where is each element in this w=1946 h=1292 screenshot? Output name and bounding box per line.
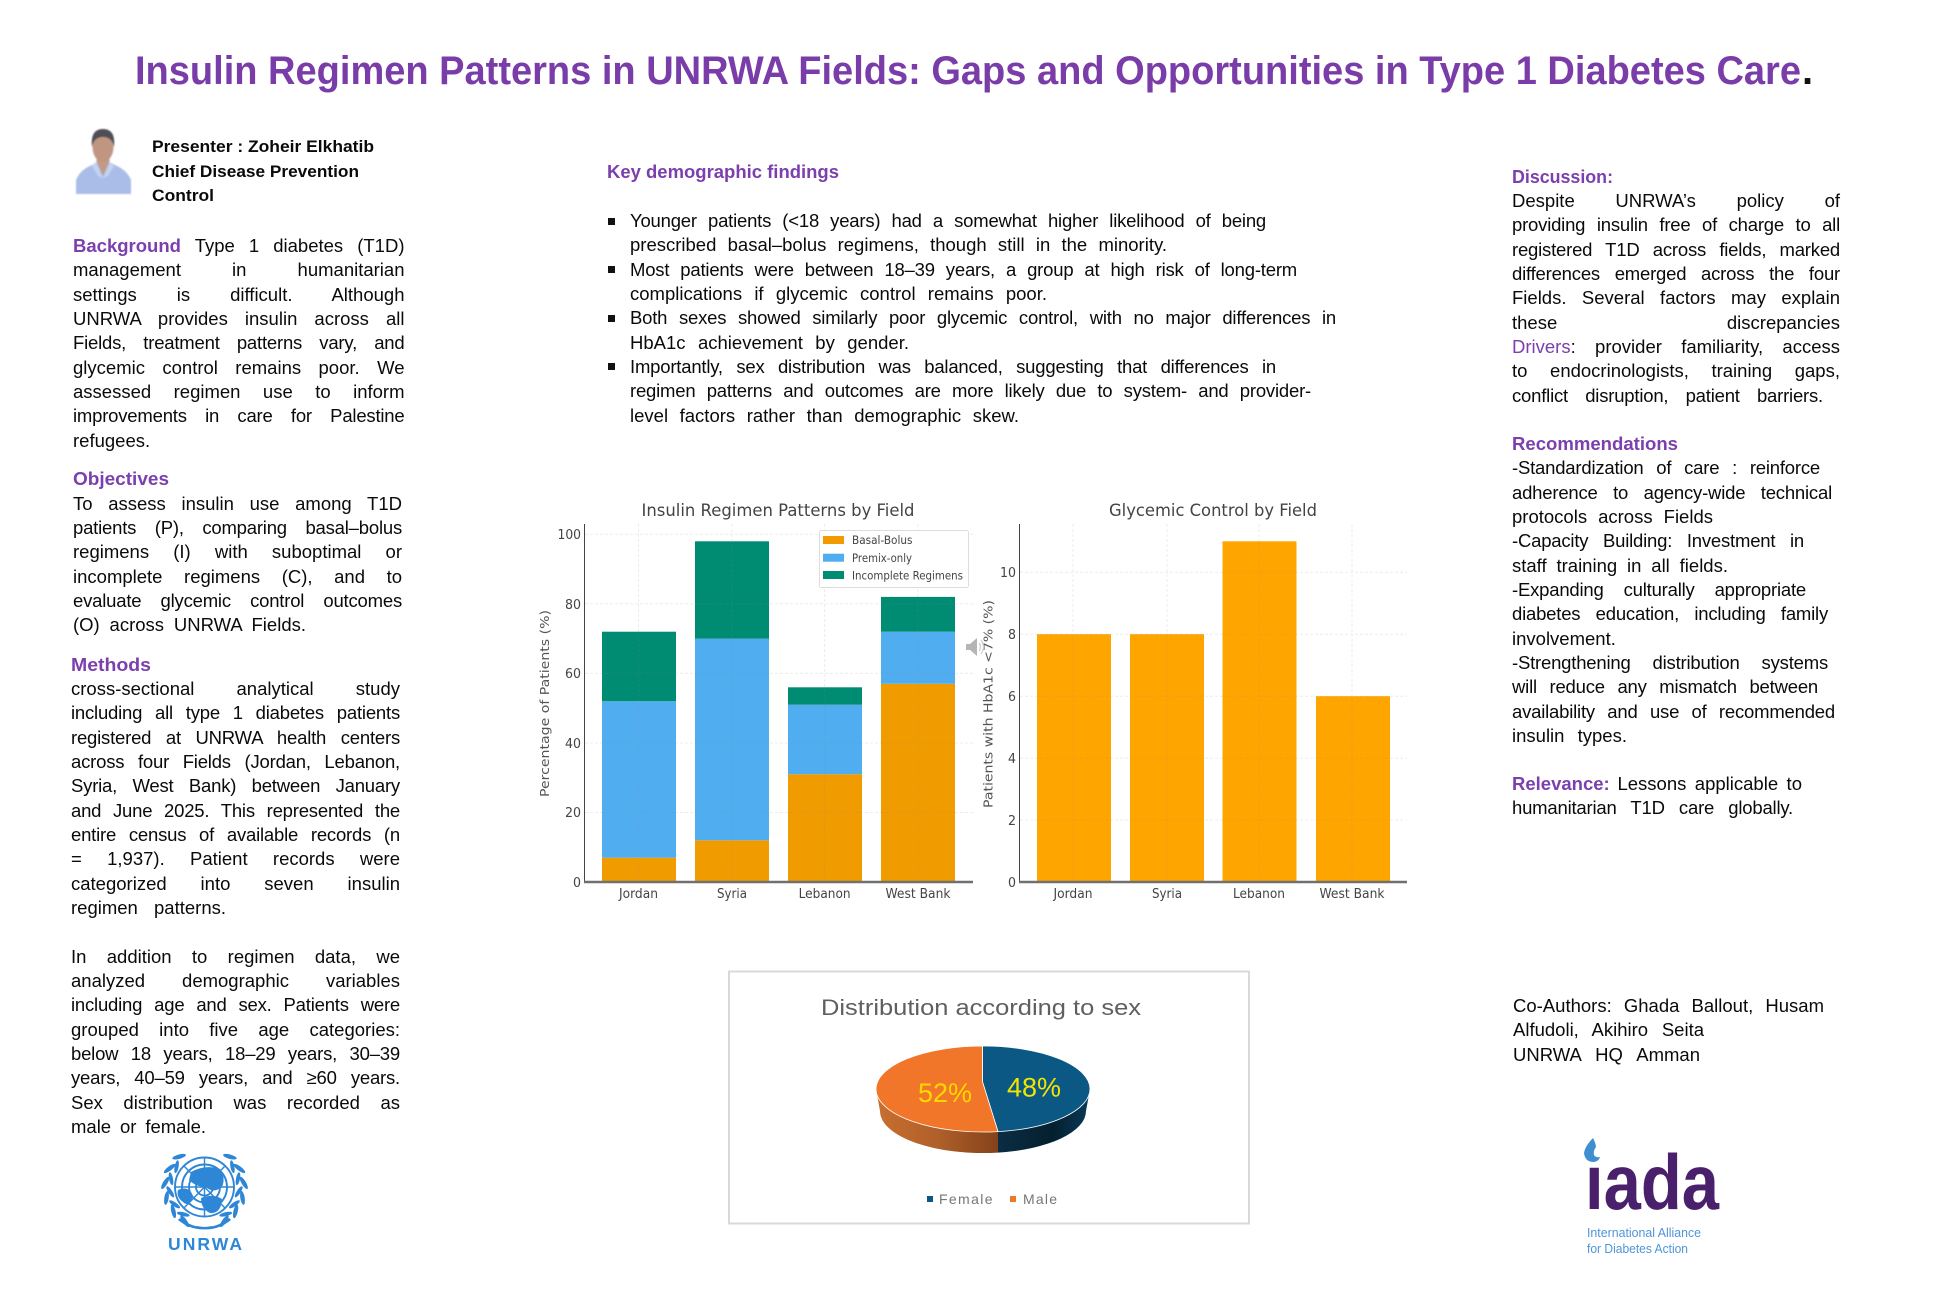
x axis categories: Syria bbox=[717, 887, 747, 902]
text block: key demographic findings: Importantly, sex distribution was balanced, suggesting that differences in bbox=[630, 356, 1276, 377]
x axis categories: West Bank bbox=[1320, 887, 1385, 902]
emblem laurel wreath left bbox=[160, 1153, 213, 1229]
stacked bars: West Bank bbox=[881, 597, 955, 882]
y axis ticks: 0 bbox=[1008, 876, 1016, 891]
x axis categories: Syria bbox=[1152, 887, 1182, 902]
text block: discussion: registered T1D across fields, marked bbox=[1512, 239, 1840, 260]
text block: demographic variables: years, 40–59 years, and ≥60 years. bbox=[71, 1067, 400, 1088]
bars bbox=[1037, 541, 1390, 882]
stacked bars: Jordan bbox=[602, 632, 676, 882]
text block: co-authors bbox=[1513, 995, 1824, 1065]
logo wordmark: UNRWA bbox=[168, 1234, 242, 1254]
legend: Basal-Bolus bbox=[852, 533, 913, 547]
text block: relevance bbox=[1512, 773, 1802, 818]
text block: recommendations: diabetes education, including family bbox=[1512, 603, 1828, 624]
logo tagline bbox=[1587, 1226, 1701, 1256]
pie title: Distribution according to sex bbox=[821, 995, 1141, 1020]
y axis ticks: 8 bbox=[1008, 628, 1016, 643]
emblem globe bbox=[175, 1157, 234, 1217]
text block: recommendations: -Strengthening distribution systems bbox=[1512, 652, 1828, 673]
logo: UNRWA bbox=[160, 1153, 249, 1254]
text block: key demographic findings: complications if glycemic control remains poor. bbox=[630, 283, 1047, 304]
text block: methods: and June 2025. This represented the bbox=[71, 800, 400, 821]
text block: background: refugees. bbox=[73, 430, 150, 451]
pie side: female bbox=[998, 1089, 1090, 1153]
logo tagline: for Diabetes Action bbox=[1587, 1242, 1688, 1256]
heading: key demographic findings: Key demographic findings bbox=[607, 161, 839, 182]
text block: demographic variables: Sex distribution was recorded as bbox=[71, 1092, 400, 1113]
text block: relevance: humanitarian T1D care globally. bbox=[1512, 797, 1793, 818]
text block: recommendations bbox=[1512, 457, 1835, 746]
y axis ticks: 2 bbox=[1008, 814, 1016, 829]
stacked bars: Lebanon bbox=[788, 687, 862, 882]
logo wordmark: iada bbox=[1585, 1138, 1720, 1226]
text block: methods: across four Fields (Jordan, Lebanon, bbox=[71, 751, 400, 772]
y axis ticks: 6 bbox=[1008, 690, 1016, 705]
heading: recommendations: Recommendations bbox=[1512, 433, 1678, 454]
x axis categories: Lebanon bbox=[799, 887, 851, 902]
text block: background: UNRWA provides insulin across all bbox=[73, 308, 404, 329]
text block: methods: including all type 1 diabetes patients bbox=[71, 702, 400, 723]
text block: recommendations: -Standardization of care : reinforce bbox=[1512, 457, 1820, 478]
text block: co-authors: UNRWA HQ Amman bbox=[1513, 1044, 1700, 1065]
y axis ticks: 100 bbox=[558, 528, 581, 543]
presenter details bbox=[152, 137, 374, 205]
text block: recommendations: protocols across Fields bbox=[1512, 506, 1713, 527]
pie legend bbox=[927, 1191, 1057, 1207]
text block: discussion: conflict disruption, patient barriers. bbox=[1512, 385, 1823, 406]
text block: discussion: these discrepancies bbox=[1512, 312, 1840, 333]
text block: discussion bbox=[1512, 190, 1840, 406]
legend: Incomplete Regimens bbox=[852, 568, 963, 582]
text block: methods: Syria, West Bank) between January bbox=[71, 775, 400, 796]
text block: demographic variables: In addition to regimen data, we bbox=[71, 946, 400, 966]
icon: blue drop bbox=[1584, 1138, 1600, 1162]
presenter details: Control bbox=[152, 186, 214, 205]
icon: presenter photo bbox=[76, 129, 131, 194]
text block: recommendations: involvement. bbox=[1512, 628, 1616, 649]
text block: key demographic findings: Most patients were between 18–39 years, a group at high risk of long-term bbox=[630, 259, 1297, 280]
text block: key demographic findings bbox=[630, 210, 1336, 426]
chart title: Insulin Regimen Patterns by Field bbox=[642, 501, 914, 520]
logo tagline: International Alliance bbox=[1587, 1226, 1701, 1240]
text block: demographic variables: below 18 years, 18–29 years, 30–39 bbox=[71, 1043, 400, 1064]
text block: methods: regimen patterns. bbox=[71, 897, 226, 918]
text block: key demographic findings: Both sexes showed similarly poor glycemic control, with no major differences in bbox=[630, 307, 1336, 328]
title: Insulin Regimen Patterns in UNRWA Fields: Gaps and Opportunities in Type 1 Diabetes Care bbox=[135, 49, 1801, 93]
text block: methods: cross-sectional analytical study bbox=[71, 678, 400, 699]
text block: background: Fields, treatment patterns vary, and bbox=[73, 332, 404, 353]
heading: discussion: Discussion: bbox=[1512, 166, 1613, 187]
x axis categories bbox=[1053, 887, 1385, 902]
text block: discussion: to endocrinologists, training gaps, bbox=[1512, 360, 1840, 381]
text block: key demographic findings: Younger patients (<18 years) had a somewhat higher likelihood of being bbox=[630, 210, 1266, 231]
text block: recommendations: adherence to agency-wide technical bbox=[1512, 482, 1832, 503]
y axis ticks: 60 bbox=[565, 667, 581, 682]
pie legend: Female bbox=[939, 1191, 993, 1207]
text block: demographic variables: including age and sex. Patients were bbox=[71, 994, 400, 1015]
text block: recommendations: availability and use of recommended bbox=[1512, 701, 1835, 722]
text block: demographic variables: grouped into five age categories: bbox=[71, 1019, 400, 1040]
text block: key demographic findings: HbA1c achievement by gender. bbox=[630, 332, 909, 353]
text block: relevance: Lessons applicable to bbox=[1617, 773, 1802, 794]
heading: objectives: Objectives bbox=[73, 468, 169, 489]
text block: recommendations: -Expanding culturally appropriate bbox=[1512, 579, 1806, 600]
text block: methods bbox=[71, 678, 400, 918]
x axis categories: Jordan bbox=[618, 887, 658, 902]
text block: demographic variables: male or female. bbox=[71, 1116, 206, 1137]
text block: discussion: providing insulin free of charge to all bbox=[1512, 214, 1840, 235]
label: 48%: 48% bbox=[1007, 1072, 1061, 1102]
y axis ticks: 0 bbox=[573, 876, 581, 891]
text block: objectives: To assess insulin use among T1D bbox=[73, 493, 402, 514]
y axis ticks bbox=[1000, 566, 1016, 891]
text block: key demographic findings: prescribed basal–bolus regimens, though still in the minority. bbox=[630, 234, 1167, 255]
bullet marker 3 bbox=[608, 315, 615, 322]
text block: recommendations: insulin types. bbox=[1512, 725, 1627, 746]
text block: background: Background bbox=[73, 235, 181, 256]
legend: Premix-only bbox=[852, 551, 912, 565]
emblem continents bbox=[178, 1167, 224, 1213]
panel: sex distribution pie chart bbox=[729, 972, 1249, 1224]
text block: demographic variables: analyzed demographic variables bbox=[71, 970, 400, 991]
y axis label: Patients with HbA1c <7% (%) bbox=[980, 600, 996, 808]
bullet marker 4 bbox=[608, 363, 615, 370]
y axis label: Percentage of Patients (%) bbox=[537, 610, 552, 797]
text block: key demographic findings: regimen patterns and outcomes are more likely due to system- and provider- bbox=[630, 380, 1311, 401]
y axis ticks bbox=[558, 528, 581, 891]
bar chart: insulin regimen patterns by field bbox=[537, 501, 973, 902]
text block: background: glycemic control remains poor. We bbox=[73, 357, 404, 378]
text block: methods: registered at UNRWA health centers bbox=[71, 727, 400, 748]
text block: objectives: patients (P), comparing basal–bolus bbox=[73, 517, 402, 538]
bar chart: glycemic control by field bbox=[980, 501, 1407, 902]
text block: background: settings is difficult. Although bbox=[73, 284, 404, 305]
text block: objectives: evaluate glycemic control outcomes bbox=[73, 590, 402, 611]
y axis ticks: 4 bbox=[1008, 752, 1016, 767]
text block: background: Type 1 diabetes (T1D) bbox=[195, 235, 404, 256]
x axis categories: West Bank bbox=[886, 887, 951, 902]
pie side: male bbox=[876, 1089, 998, 1153]
x axis categories: Lebanon bbox=[1233, 887, 1285, 902]
title full stop: . bbox=[1802, 49, 1813, 93]
pie slice: female bbox=[982, 1046, 1090, 1132]
text block: methods: = 1,937). Patient records were bbox=[71, 848, 400, 869]
y axis ticks: 20 bbox=[565, 806, 581, 821]
pie slice: male bbox=[876, 1046, 998, 1132]
text block: discussion: Despite UNRWA’s policy of bbox=[1512, 190, 1840, 211]
text block: relevance: Relevance: bbox=[1512, 773, 1610, 794]
text block: recommendations: will reduce any mismatch between bbox=[1512, 676, 1818, 697]
text block: objectives: regimens (I) with suboptimal or bbox=[73, 541, 402, 562]
y axis ticks: 40 bbox=[565, 737, 581, 752]
text block: background: management in humanitarian bbox=[73, 259, 404, 280]
text block: background: assessed regimen use to inform bbox=[73, 381, 404, 402]
presenter details: Presenter : Zoheir Elkhatib bbox=[152, 137, 374, 156]
text block: discussion: differences emerged across the four bbox=[1512, 263, 1840, 284]
text block: methods: entire census of available records (n bbox=[71, 824, 400, 845]
y axis ticks: 80 bbox=[565, 598, 581, 613]
text block: demographic variables bbox=[71, 946, 400, 1137]
text block: objectives: (O) across UNRWA Fields. bbox=[73, 614, 306, 635]
pie legend: Male bbox=[1023, 1191, 1057, 1207]
text block: discussion: Fields. Several factors may explain bbox=[1512, 287, 1840, 308]
logo: IADA bbox=[1582, 1138, 1720, 1256]
chart title: Glycemic Control by Field bbox=[1109, 501, 1317, 520]
label: 52%: 52% bbox=[918, 1078, 972, 1108]
bullet marker 2 bbox=[608, 266, 615, 273]
x axis categories bbox=[618, 887, 951, 902]
legend bbox=[820, 530, 968, 588]
text block: co-authors: Alfudoli, Akihiro Seita bbox=[1513, 1019, 1704, 1040]
text block: discussion: Drivers: provider familiarity, access bbox=[1512, 336, 1840, 357]
text block: background: improvements in care for Palestine bbox=[73, 405, 404, 426]
text block: objectives bbox=[73, 493, 402, 635]
stacked bars: Syria bbox=[695, 541, 769, 882]
text block: background bbox=[73, 235, 404, 451]
x axis categories: Jordan bbox=[1053, 887, 1092, 902]
text block: objectives: incomplete regimens (C), and to bbox=[73, 566, 402, 587]
y axis ticks: 10 bbox=[1000, 566, 1016, 581]
text block: recommendations: -Capacity Building: Investment in bbox=[1512, 530, 1804, 551]
icon: speaker bbox=[966, 638, 984, 656]
text block: methods: categorized into seven insulin bbox=[71, 873, 400, 894]
presenter details: Chief Disease Prevention bbox=[152, 162, 359, 181]
heading: methods: Methods bbox=[71, 654, 151, 675]
bullet marker 1 bbox=[608, 218, 615, 225]
text block: recommendations: staff training in all fields. bbox=[1512, 555, 1728, 576]
text block: key demographic findings: level factors rather than demographic skew. bbox=[630, 405, 1019, 426]
emblem laurel wreath right bbox=[196, 1153, 249, 1229]
text block: co-authors: Co-Authors: Ghada Ballout, Husam bbox=[1513, 995, 1824, 1016]
